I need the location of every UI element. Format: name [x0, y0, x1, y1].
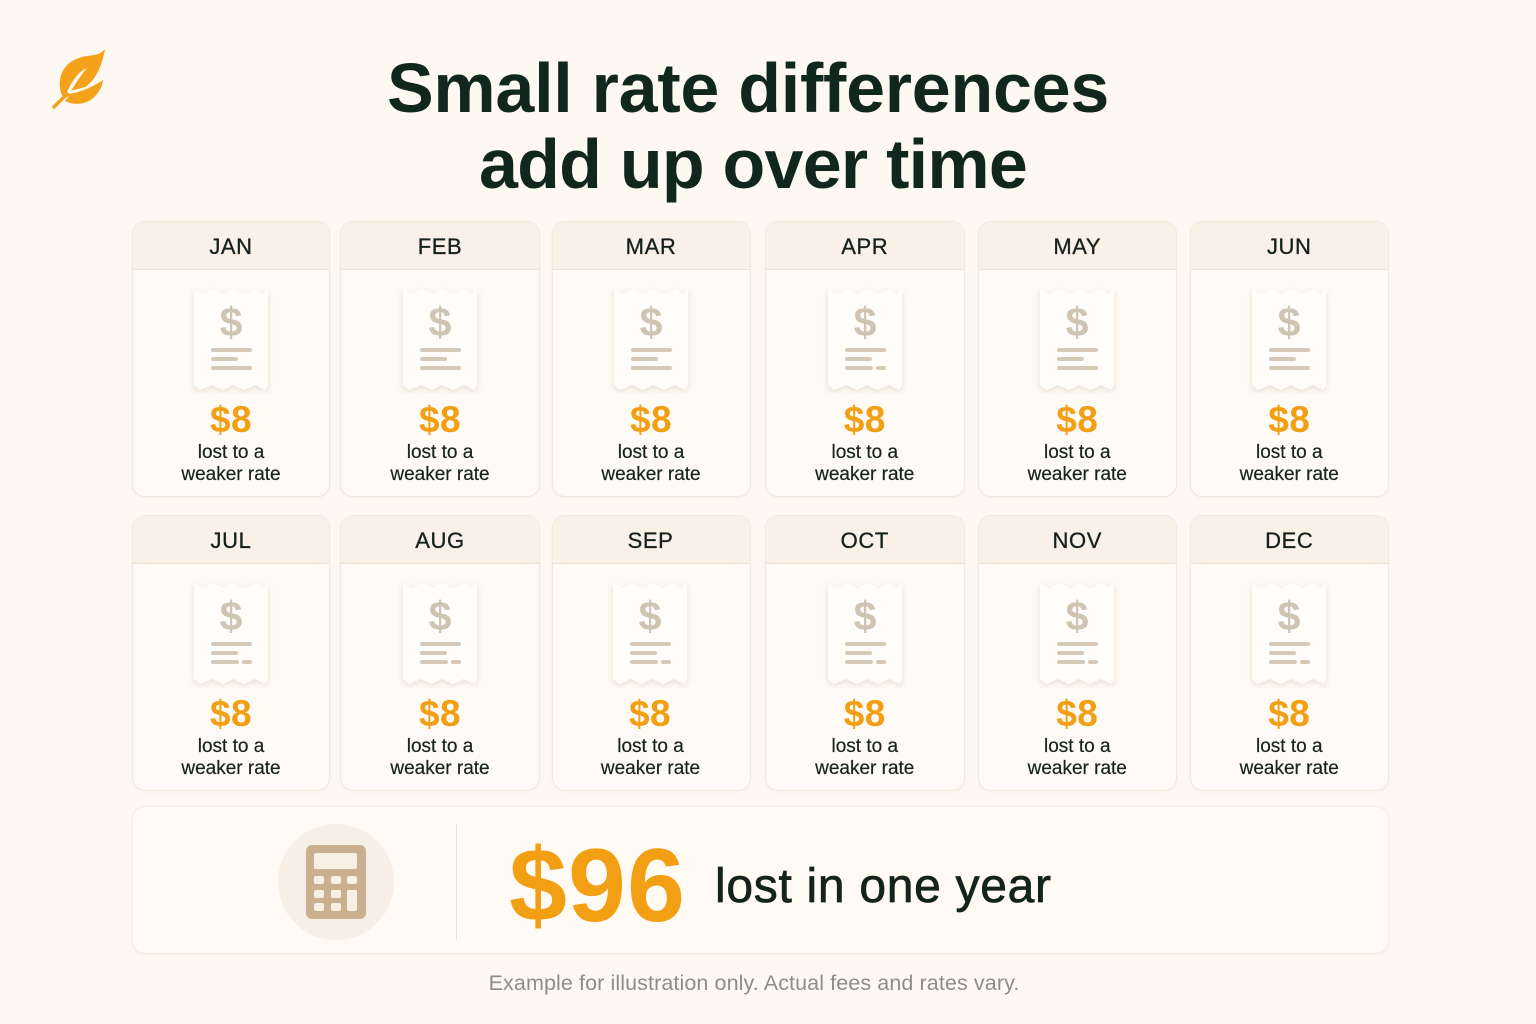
panel: March: lost to a [618, 442, 684, 463]
panel: March [552, 221, 750, 497]
panel: July: lost to a [198, 736, 264, 757]
panel: June [1190, 221, 1389, 497]
panel: January: $8 [210, 399, 252, 440]
icon: leaf logo [52, 49, 105, 109]
panel: May: lost to a [1044, 442, 1111, 463]
panel: October: weaker rate [815, 758, 914, 779]
panel: October: lost to a [831, 736, 898, 757]
panel: April: $8 [844, 399, 886, 440]
title: Small rate differences [387, 49, 1109, 127]
panel: May: $8 [1056, 399, 1098, 440]
panel: September: SEP [628, 528, 673, 553]
panel: January: lost to a [198, 442, 264, 463]
panel: yearly total [132, 806, 1389, 954]
panel: November: NOV [1052, 528, 1102, 553]
panel: July: $8 [210, 693, 252, 734]
title [387, 49, 1109, 203]
panel: December: $8 [1268, 693, 1310, 734]
panel: January [132, 221, 330, 497]
panel: February: weaker rate [390, 464, 490, 485]
panel: April: lost to a [831, 442, 898, 463]
panel: December: weaker rate [1240, 758, 1339, 779]
panel: April [764, 221, 965, 497]
panel: March: MAR [626, 234, 676, 259]
panel: November [978, 515, 1177, 791]
panel: March: $8 [630, 399, 672, 440]
panel: July [132, 515, 330, 791]
panel: July: JUL [211, 528, 251, 553]
panel: February: lost to a [407, 442, 473, 463]
panel: March: weaker rate [601, 464, 701, 485]
panel: September: lost to a [617, 736, 684, 757]
panel: November: lost to a [1044, 736, 1111, 757]
panel: June: JUN [1267, 234, 1312, 259]
panel: November: $8 [1056, 693, 1098, 734]
panel: February [340, 221, 540, 497]
panel: April: weaker rate [815, 464, 914, 485]
footnote: Example for illustration only. Actual fees and rates vary. [489, 971, 1019, 995]
icon: calculator [278, 824, 394, 940]
panel: October: $8 [844, 693, 886, 734]
panel: August: weaker rate [390, 758, 490, 779]
panel: June: weaker rate [1240, 464, 1339, 485]
panel: October [764, 515, 965, 791]
panel: April: APR [841, 234, 888, 259]
panel: February: $8 [419, 399, 461, 440]
panel: September: weaker rate [601, 758, 700, 779]
panel: September [552, 515, 750, 791]
panel: June: $8 [1268, 399, 1310, 440]
panel: January: JAN [209, 234, 253, 259]
total caption: lost in one year [715, 860, 1052, 913]
panel: May: weaker rate [1028, 464, 1127, 485]
panel: July: weaker rate [181, 758, 281, 779]
panel: May [978, 221, 1177, 497]
panel: December [1190, 515, 1389, 791]
panel: June: lost to a [1256, 442, 1323, 463]
panel: February: FEB [418, 234, 462, 259]
panel: November: weaker rate [1028, 758, 1127, 779]
panel: October: OCT [841, 528, 889, 553]
panel: December: lost to a [1256, 736, 1323, 757]
panel: January: weaker rate [181, 464, 281, 485]
panel: May: MAY [1053, 234, 1101, 259]
panel: August: lost to a [407, 736, 473, 757]
panel: August: $8 [419, 693, 461, 734]
panel: August: AUG [415, 528, 465, 553]
panel: August [340, 515, 540, 791]
panel: September: $8 [629, 693, 671, 734]
panel: December: DEC [1265, 528, 1313, 553]
title: add up over time [479, 125, 1027, 203]
total amount: $96 [509, 828, 686, 944]
